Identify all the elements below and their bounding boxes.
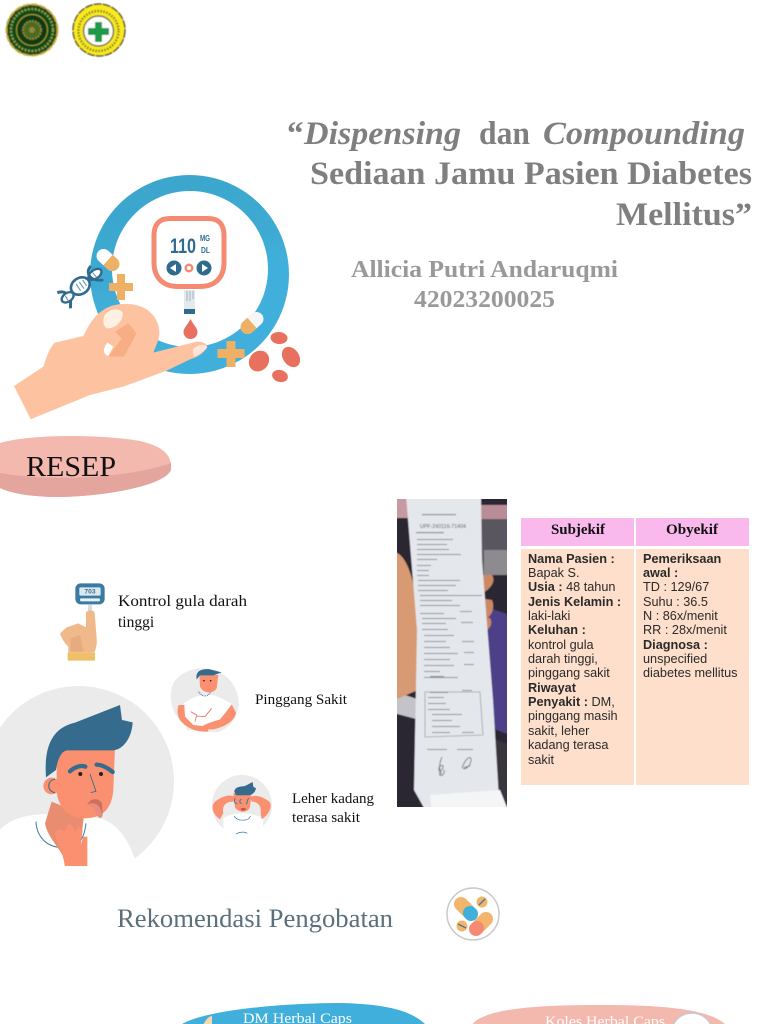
heading: rekomendasi pengobatan: Rekomendasi Pengobatan [117,904,393,933]
illustration: sick man with sore throat [0,686,174,877]
cell: objective data: RR : 28x/menit [643,623,727,637]
logo: university seal [6,4,58,56]
cell: objective data: Diagnosa : [643,638,708,652]
capsule right [238,309,266,337]
header: obyektif: Obyekif [666,522,718,538]
pill: koles herbal caps [471,1005,727,1024]
cell: subjective data: kadang terasa [528,738,609,752]
text: pinggang sakit: Pinggang Sakit [255,692,347,708]
author name and student number: 42023200025 [414,287,555,313]
text: kontrol gula darah tinggi [118,593,247,631]
cell: objective data: unspecified [643,652,707,666]
illustration: man holding sore neck [212,775,272,837]
capsule left [94,246,122,274]
cell: objective data: diabetes mellitus [643,666,738,680]
title: Mellitus” [616,197,752,233]
author name and student number [351,257,618,313]
cell: subjective data: pinggang masih [528,709,618,723]
title: Compounding [543,116,745,152]
red blood cells [245,331,304,384]
plus right [218,341,244,367]
title [287,116,752,233]
author name and student number: Allicia Putri Andaruqmi [351,257,618,283]
icon: finger glucose test [60,583,105,661]
cell: subjective data: laki-laki [528,609,570,623]
cell: objective data [636,549,749,785]
cell: subjective data: Penyakit : DM, [528,695,615,709]
header: subjektif: Subjekif [551,522,605,538]
glucose meter: MG [200,234,210,243]
cell: objective data: TD : 129/67 [643,580,709,594]
text: leher kadang terasa sakit: Leher kadang [292,791,374,807]
receipt text: UPF-240116-71404 [420,524,466,530]
cell: subjective data: Usia : 48 tahun [528,580,615,594]
title: dan [479,116,530,152]
cell: objective data: N : 86x/menit [643,609,718,623]
cell: subjective data: pinggang sakit [528,666,610,680]
text: kontrol gula darah tinggi: Kontrol gula darah [118,593,247,610]
cell: subjective data: Nama Pasien : [528,552,615,566]
pill: dm herbal caps [179,1003,427,1024]
illustration: man with back pain [171,668,239,732]
header: obyektif [636,518,749,546]
title: “ [287,116,304,152]
hand pressing [14,304,207,419]
illustration: glucose meter ring and hand [14,175,304,419]
plus left [109,274,133,300]
cell: subjective data: sakit, leher [528,724,590,738]
text: kontrol gula darah tinggi: tinggi [118,614,155,631]
cell: objective data: Pemeriksaan [643,552,721,566]
prescription receipt photo [397,499,507,807]
text: leher kadang terasa sakit [292,791,374,826]
cell: subjective data: Keluhan : [528,623,586,637]
resep badge [0,436,171,497]
title: Sediaan Jamu Pasien Diabetes [310,156,752,192]
title: Dispensing [303,116,461,152]
glucose meter: DL [201,246,210,255]
icon: pills [447,888,499,940]
dna helix [57,266,103,308]
glucose meter [154,218,224,314]
cell: subjective data: kontrol gula [528,638,595,652]
logo: health seal with green cross [73,4,125,56]
blood drop [184,319,198,339]
icon: finger glucose test: 703 [84,589,96,596]
blue ring [90,175,289,374]
cell: subjective data: Bapak S. [528,566,580,580]
cell: subjective data [521,549,634,785]
cell: subjective data: sakit [528,753,555,767]
header: subjektif [521,518,634,546]
resep badge: RESEP [26,452,116,483]
cell: objective data: Suhu : 36.5 [643,595,708,609]
soap table [521,518,749,785]
cell: subjective data: Riwayat [528,681,577,695]
cell: subjective data: Jenis Kelamin : [528,595,621,609]
cell: subjective data: darah tinggi, [528,652,598,666]
cell: objective data: awal : [643,566,678,580]
text: leher kadang terasa sakit: terasa sakit [292,810,360,826]
glucose meter: 110 [170,235,196,258]
